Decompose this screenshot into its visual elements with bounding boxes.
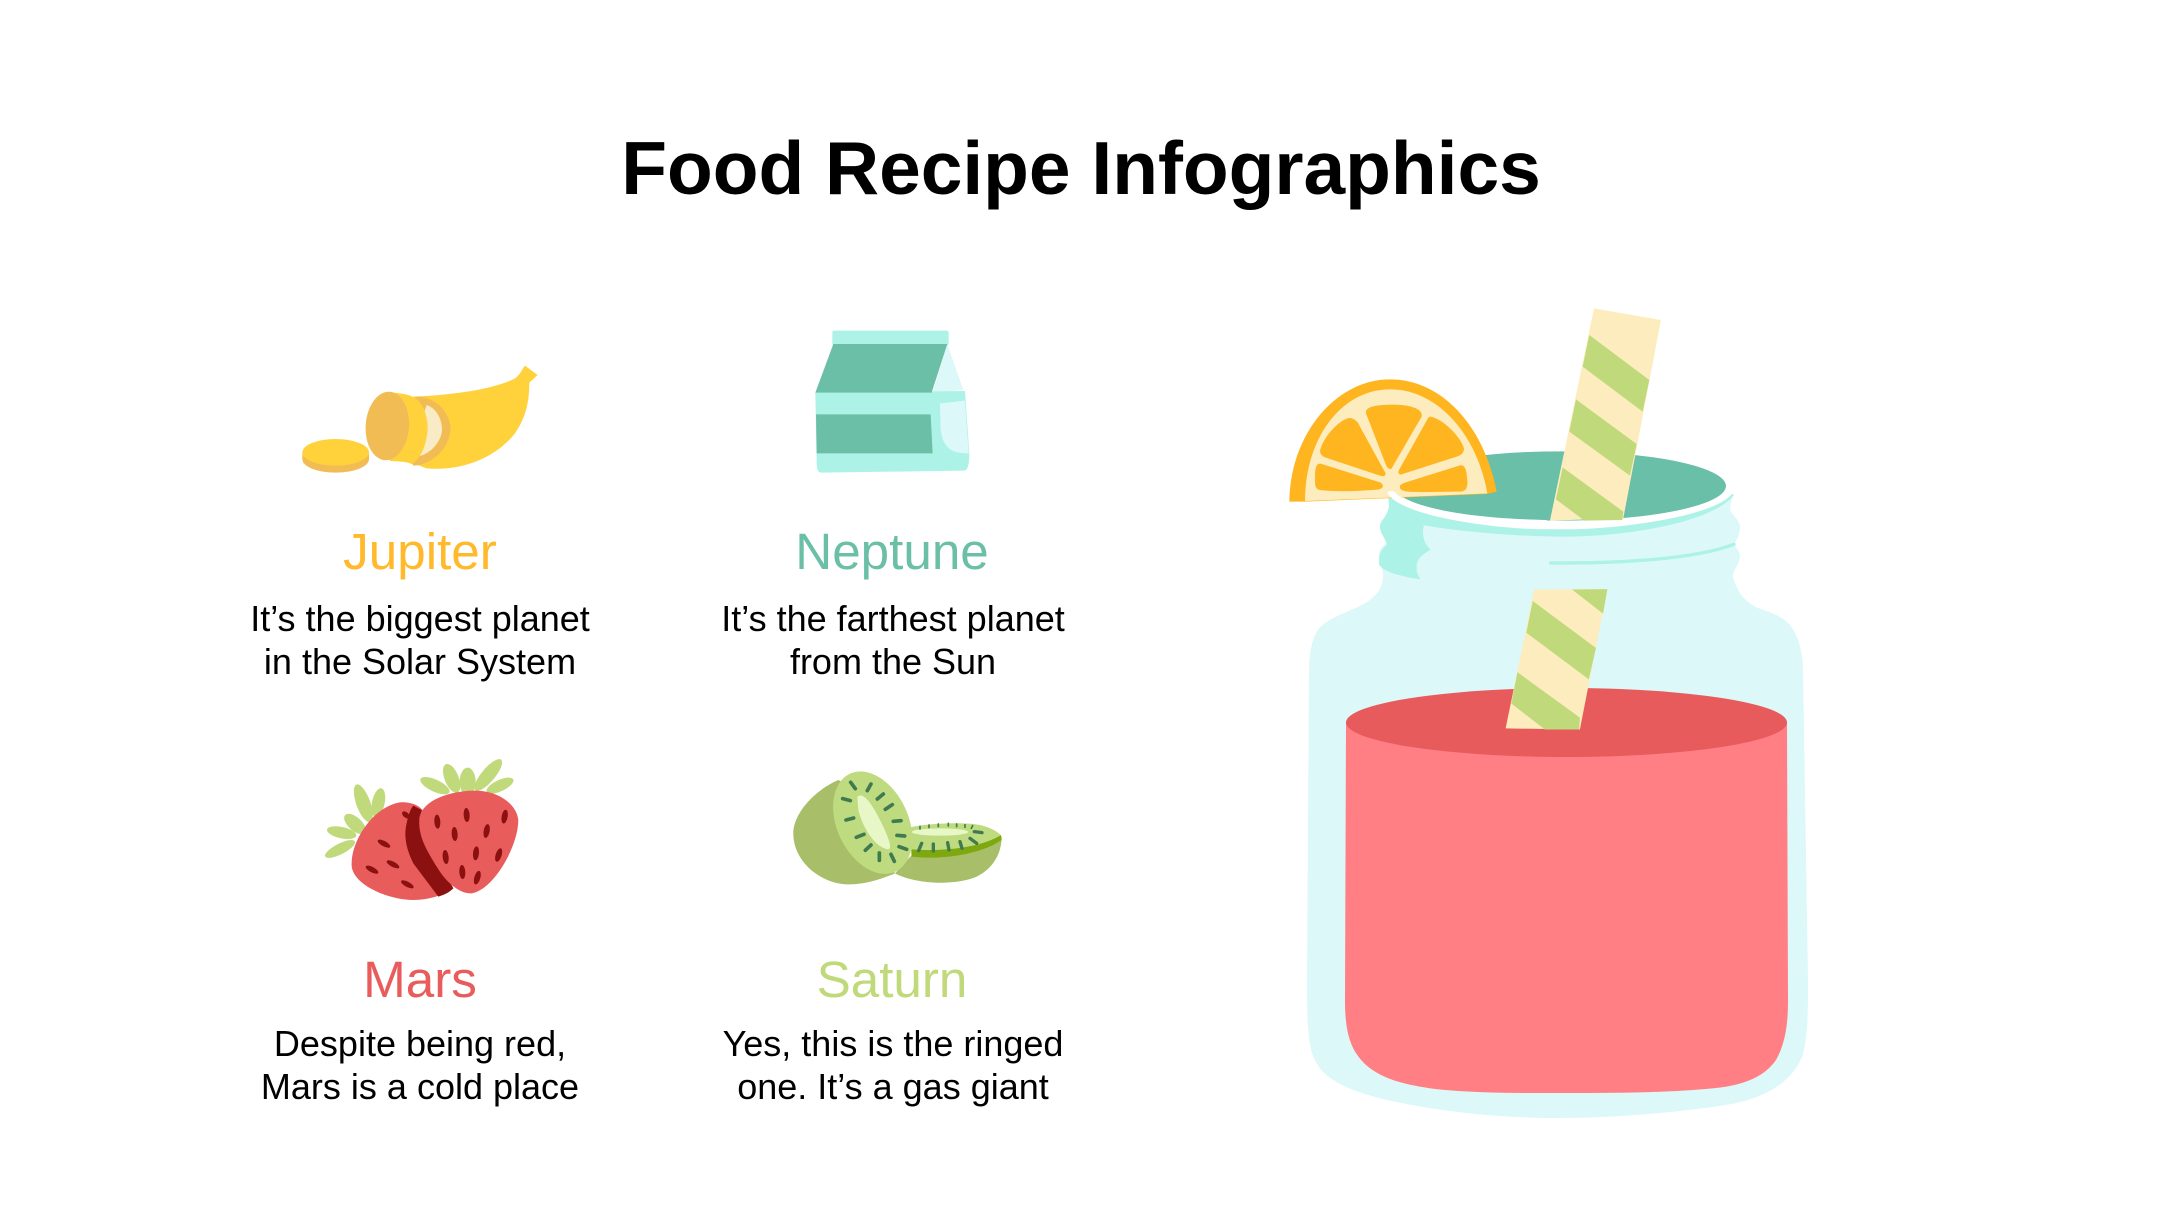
text: Neptune description: from the Sun <box>790 641 996 682</box>
smoothie liquid <box>1345 722 1788 1093</box>
panel: Saturn <box>723 759 1063 1107</box>
text: Neptune description: It’s the farthest planet <box>721 598 1065 639</box>
jar body <box>1307 495 1808 1118</box>
text: Mars description: Despite being red, <box>274 1023 566 1064</box>
illustration: smoothie jar <box>1289 308 1808 1118</box>
icon: kiwi <box>793 759 1002 887</box>
icon: milk carton <box>815 331 969 473</box>
smoothie surface <box>1346 688 1787 757</box>
panel: Neptune <box>721 331 1065 682</box>
panel: Mars <box>261 755 579 1107</box>
title: Food Recipe Infographics <box>621 126 1541 210</box>
straw: lower part <box>1506 589 1607 730</box>
label: Jupiter: Jupiter <box>343 523 497 580</box>
straw: upper part <box>1550 308 1661 521</box>
text: Jupiter description: in the Solar System <box>264 641 576 682</box>
orange slice <box>1289 379 1547 529</box>
jar lid details <box>1379 451 1734 579</box>
text: Jupiter description: It’s the biggest planet <box>250 598 590 639</box>
label: Neptune: Neptune <box>795 523 989 580</box>
icon: strawberry <box>323 755 518 900</box>
label: Mars: Mars <box>363 951 477 1008</box>
text: Mars description: Mars is a cold place <box>261 1066 579 1107</box>
label: Saturn: Saturn <box>817 951 967 1008</box>
text: Saturn description: one. It’s a gas giant <box>737 1066 1049 1107</box>
panel: Jupiter <box>250 366 590 682</box>
icon: banana <box>302 366 538 473</box>
text: Saturn description: Yes, this is the ringed <box>723 1023 1063 1064</box>
